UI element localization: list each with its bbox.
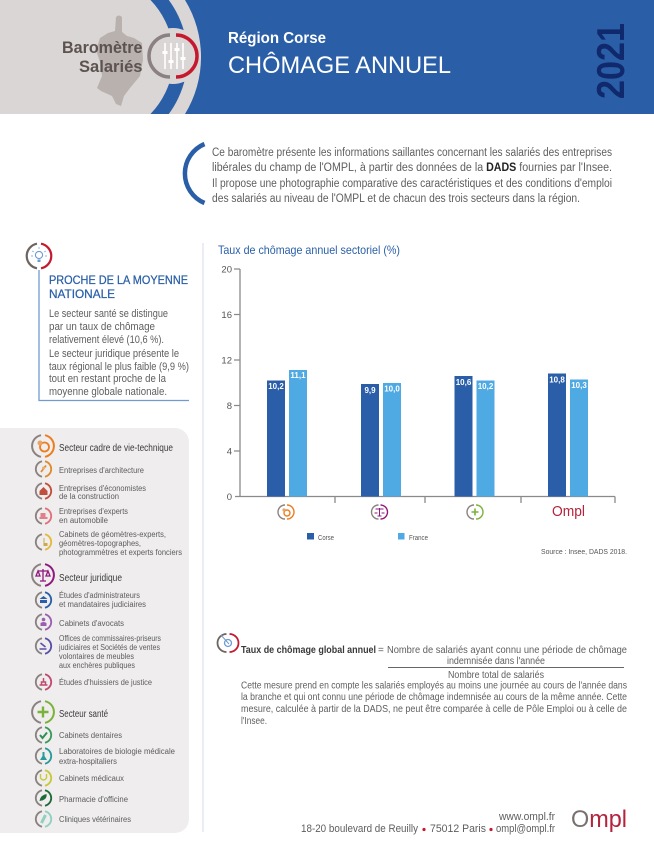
bars: santé: 10,2	[478, 382, 494, 391]
item: administrateurs: Études d'administrateurs	[59, 591, 140, 600]
bars: OMPL	[548, 374, 588, 496]
callout body: par un taux de chômage	[49, 321, 155, 333]
item: géomètres: Cabinets de géomètres-experts,	[59, 530, 166, 539]
page title: CHÔMAGE ANNUEL	[228, 51, 451, 79]
category icon: cadre de vie	[278, 505, 294, 519]
item: économistes: Entreprises d'économistes	[59, 484, 146, 493]
item: commissaires-priseurs: volontaires de meubles	[59, 652, 134, 661]
item: dentaires: Cabinets dentaires	[59, 731, 122, 740]
item: vétérinaires: Cliniques vétérinaires	[59, 815, 131, 824]
callout heading: PROCHE DE LA MOYENNE	[49, 273, 188, 287]
item: architecture: Entreprises d'architecture	[59, 466, 145, 475]
item: laboratoires	[36, 747, 176, 766]
item: experts automobile	[36, 507, 128, 525]
item: pharmacie: Pharmacie d'officine	[59, 795, 129, 804]
callout heading: NATIONALE	[49, 287, 115, 301]
item: architecture	[36, 461, 145, 477]
formula numerator: Nombre de salariés ayant connu une période de chômage	[387, 645, 627, 656]
y axis	[221, 264, 240, 503]
callout body: Le secteur juridique présente le	[49, 348, 179, 360]
item: laboratoires: Laboratoires de biologie médicale	[59, 747, 176, 756]
definition text	[241, 680, 627, 727]
callout body	[49, 308, 189, 398]
sector: juridique	[32, 564, 161, 690]
logo halo	[168, 28, 201, 84]
panel: sectors list	[0, 428, 189, 833]
callout heading	[49, 273, 188, 301]
item: commissaires-priseurs: judiciaires et Sociétés de ventes	[58, 643, 160, 652]
bars: cadre de vie-technique: 10,2	[268, 382, 284, 391]
chart legend: Corse	[318, 535, 334, 542]
callout: proche de la moyenne nationale	[27, 244, 189, 400]
item: experts automobile: Entreprises d'experts	[59, 507, 128, 516]
heading: Secteur santé	[59, 709, 108, 720]
item: économistes	[36, 483, 146, 501]
heading: Secteur cadre de vie-technique	[59, 443, 173, 454]
intro text: libérales du champ de l'OMPL, à partir des données de la DADS fournies par l'Insee.	[212, 162, 612, 174]
header banner	[0, 0, 654, 124]
item: commissaires-priseurs: aux enchères publiques	[59, 661, 135, 670]
intro text	[212, 147, 612, 205]
sector: cadre de vie-technique	[32, 435, 182, 557]
bars: cadre de vie-technique: 11,1	[290, 371, 306, 380]
category icon: santé	[467, 505, 483, 519]
item: vétérinaires	[36, 811, 131, 827]
category icon: juridique	[372, 505, 388, 519]
y axis: 20	[221, 264, 232, 276]
intro text: des salariés au niveau de l'OMPL et de chacun des trois secteurs dans la région.	[212, 193, 580, 205]
heading: Secteur juridique	[59, 573, 122, 584]
region heading: Région Corse	[228, 30, 326, 47]
logo barometer ring and sliders	[149, 35, 197, 77]
x axis	[235, 496, 615, 503]
bars: cadre de vie-technique	[267, 370, 307, 496]
bars: OMPL: 10,8	[549, 376, 565, 384]
item: experts automobile: en automobile	[59, 516, 109, 525]
footer contact: ompl@ompl.fr	[496, 823, 555, 835]
sector: santé	[32, 701, 176, 827]
item: administrateurs: et mandataires judiciaires	[59, 600, 146, 609]
formula numerator: indemnisée dans l'année	[447, 656, 545, 667]
item: médicaux: Cabinets médicaux	[59, 774, 124, 783]
item: huissiers: Études d'huissiers de justice	[59, 678, 152, 687]
callout body: taux régional le plus faible (9,9 %)	[49, 361, 189, 373]
callout body: moyenne globale nationale.	[49, 386, 167, 398]
bars: santé: 10,6	[456, 378, 472, 387]
y axis: 12	[221, 356, 232, 366]
item: laboratoires: extra-hospitaliers	[59, 757, 117, 766]
item: médicaux	[36, 770, 124, 786]
item: économistes: de la construction	[59, 492, 119, 501]
chart legend: France	[409, 535, 428, 542]
footer contact: www.ompl.fr	[498, 811, 555, 823]
item: avocats: Cabinets d'avocats	[59, 619, 124, 628]
callout body: relativement élevé (10,6 %).	[49, 334, 164, 346]
formula label: Taux de chômage global annuel	[241, 645, 376, 656]
item: pharmacie	[36, 790, 129, 806]
header blue arc band	[150, 0, 181, 124]
icon: definition target	[218, 634, 238, 652]
icon: light bulb	[27, 244, 51, 268]
header grey logo area	[0, 0, 201, 114]
y axis: 16	[221, 310, 232, 321]
bar chart	[221, 264, 615, 520]
icon: scales	[32, 564, 54, 586]
logo name	[63, 41, 142, 72]
item: commissaires-priseurs: Offices de commissaires-priseurs	[59, 634, 161, 643]
bars: juridique: 9,9	[364, 386, 376, 395]
column divider	[202, 243, 204, 832]
bars: juridique: 10,0	[384, 384, 400, 394]
y axis: 8	[227, 401, 232, 412]
icon: plus	[32, 701, 54, 723]
category logo: OMPL: Ompl	[552, 503, 585, 520]
definition block	[218, 634, 627, 727]
chart legend	[307, 533, 428, 542]
logo name: Baromètre	[62, 38, 142, 57]
bars: santé	[454, 376, 494, 496]
item: commissaires-priseurs	[36, 634, 161, 670]
footer logo: Ompl	[571, 806, 627, 833]
intro text: Il propose une photographie comparative des caractéristiques et des conditions d'emploi	[212, 178, 612, 190]
chart title: Taux de chômage annuel sectoriel (%)	[218, 243, 400, 257]
formula denominator: Nombre total de salariés	[448, 670, 544, 681]
intro bracket	[185, 144, 204, 203]
Corsica silhouette	[96, 16, 143, 106]
item: dentaires	[36, 727, 122, 743]
year: 2021	[590, 23, 633, 99]
callout body: tout en restant proche de la	[49, 373, 167, 385]
footer contact	[301, 811, 555, 835]
bars: juridique	[361, 383, 401, 496]
item: géomètres: géomètres-topographes,	[59, 539, 141, 548]
y axis: 4	[227, 446, 232, 458]
definition text: l'Insee.	[241, 716, 267, 727]
footer contact: 75012 Paris	[430, 823, 486, 835]
bars: OMPL: 10,3	[571, 381, 587, 390]
y axis: 0	[227, 492, 232, 503]
icon: cadre de vie	[32, 435, 54, 457]
item: géomètres: photogrammètres et experts fonciers	[59, 548, 182, 557]
item: administrateurs	[36, 591, 146, 609]
footer contact: 18-20 boulevard de Reuilly	[301, 823, 418, 835]
formula equals: =	[378, 645, 384, 656]
chart source: Source : Insee, DADS 2018.	[541, 549, 627, 556]
logo name: Salariés	[79, 57, 142, 76]
callout body: Le secteur santé se distingue	[49, 308, 168, 320]
formula fraction bar	[388, 666, 624, 668]
item: géomètres	[36, 530, 182, 557]
formula numerator	[387, 645, 627, 667]
